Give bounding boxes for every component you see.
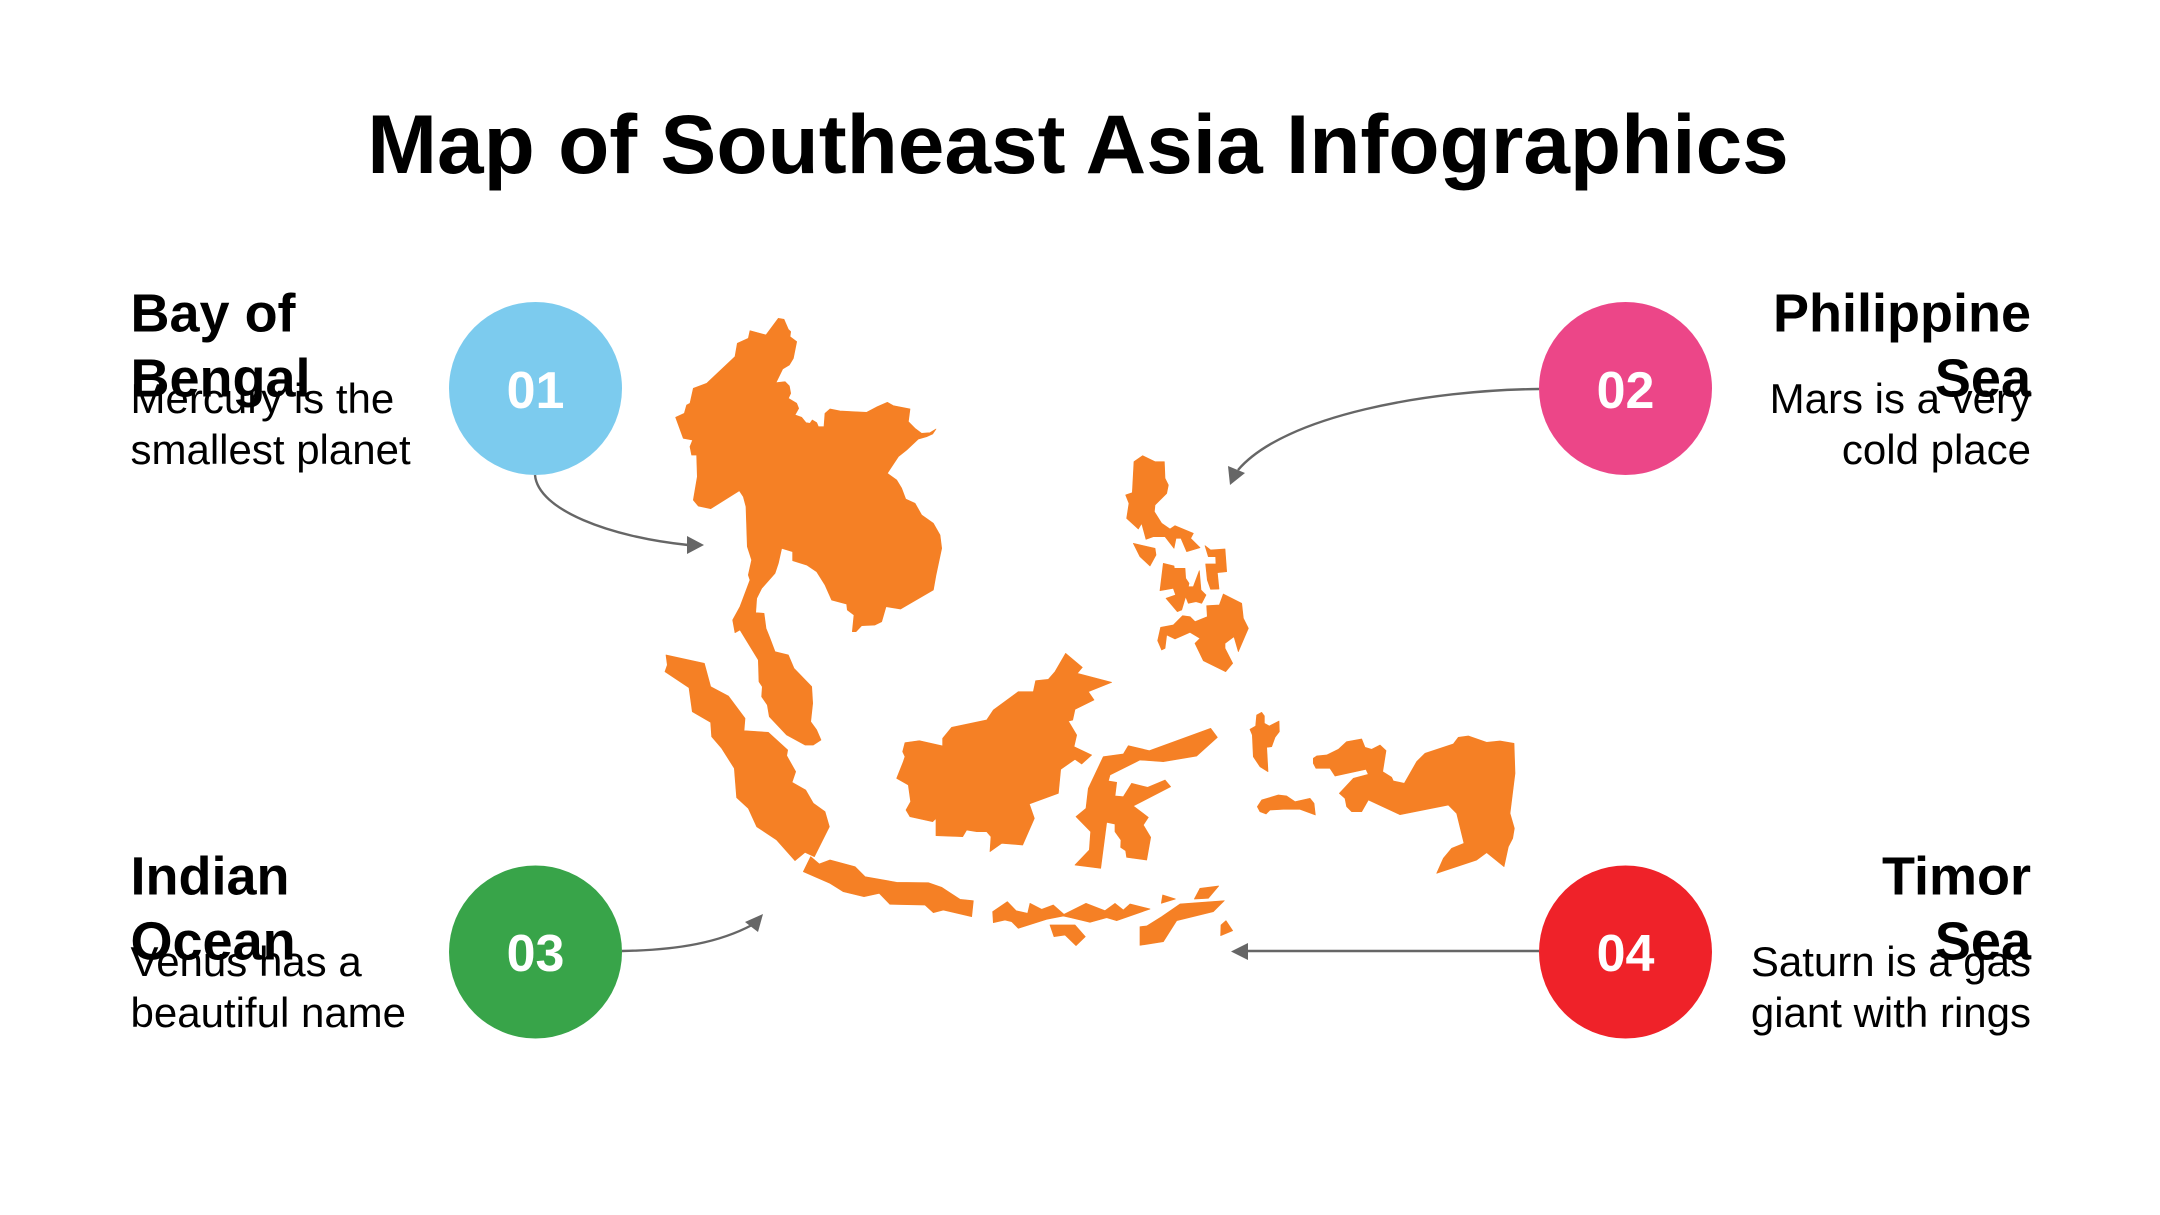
description: Venus has a	[130, 938, 362, 985]
arrow 01: Bay of Bengal to map	[535, 475, 704, 554]
badge 03: 03	[507, 925, 564, 983]
heading: Indian	[130, 846, 290, 906]
heading: Sea	[1935, 912, 2032, 972]
heading: Timor	[1882, 846, 2031, 906]
text block: Indian Ocean	[130, 846, 406, 1036]
map region: Philippines	[1126, 456, 1248, 672]
map region: Sulawesi, Maluku and New Guinea	[1075, 712, 1515, 873]
badge 04	[1539, 866, 1712, 1038]
heading: Bengal	[130, 348, 311, 408]
description: Saturn is a gas	[1751, 938, 2031, 985]
description: beautiful name	[130, 989, 406, 1036]
badge 04: 04	[1597, 925, 1654, 983]
heading: Bay of	[130, 284, 297, 344]
description: Mercury is the	[130, 375, 394, 422]
heading: Ocean	[130, 912, 296, 972]
map region: Lesser Sunda Islands	[993, 886, 1233, 946]
badge 01	[449, 302, 622, 475]
badge 02	[1539, 302, 1712, 475]
map region: mainland Southeast Asia and Malay Peninsula	[676, 318, 942, 745]
badge 03	[449, 866, 622, 1038]
map of Southeast Asia	[665, 318, 1515, 946]
arrow 02: Philippine Sea to map	[1228, 389, 1539, 485]
description: giant with rings	[1751, 989, 2031, 1036]
arrow 03: Indian Ocean to map	[622, 914, 763, 951]
description: Mars is a very	[1770, 375, 2031, 422]
heading: Sea	[1935, 348, 2032, 408]
text block: Bay of Bengal	[130, 284, 411, 473]
text block: Timor Sea	[1751, 846, 2032, 1036]
map region: Borneo	[897, 653, 1112, 852]
map region: Sumatra	[665, 655, 829, 861]
badge 02: 02	[1597, 362, 1654, 420]
description: cold place	[1842, 426, 2031, 473]
text block: Philippine Sea	[1770, 284, 2032, 473]
title: Map of Southeast Asia Infographics	[367, 97, 1789, 191]
description: smallest planet	[130, 426, 411, 473]
badge 01: 01	[507, 362, 564, 420]
arrow 04: Timor Sea to map	[1231, 943, 1539, 960]
map region: Java	[803, 857, 973, 917]
heading: Philippine	[1773, 284, 2031, 344]
